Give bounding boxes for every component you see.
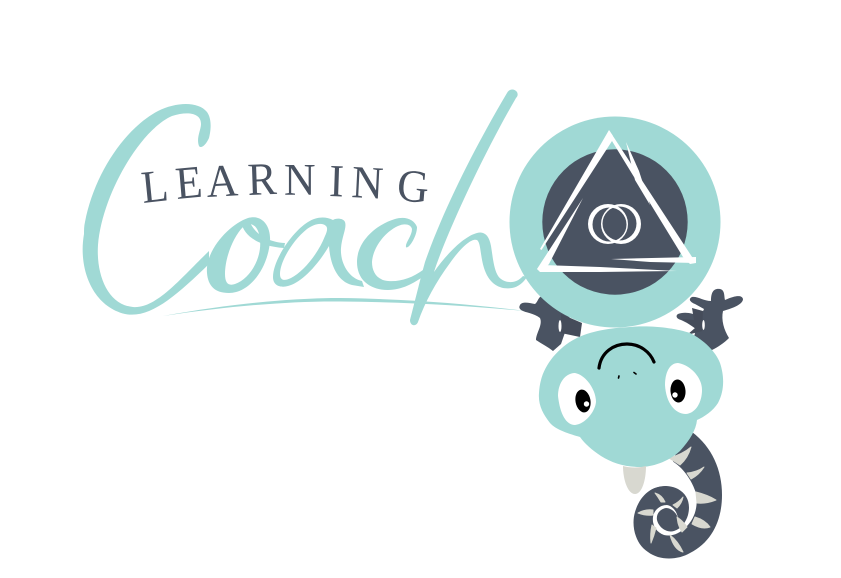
nostrils — [618, 372, 636, 378]
tongue — [623, 466, 646, 494]
wordmark: LEARNING: LEARNING — [139, 153, 431, 213]
eye white — [665, 363, 702, 414]
tail — [610, 432, 722, 558]
tail spikes — [638, 447, 716, 552]
underline swoosh — [163, 298, 525, 316]
triangle inner left stroke — [537, 198, 583, 272]
spike — [651, 525, 656, 543]
highlights — [672, 392, 678, 398]
highlights — [584, 401, 589, 407]
spike — [655, 493, 665, 502]
right hand — [677, 289, 743, 350]
letter h with tail into the badge — [410, 89, 527, 325]
letter C — [83, 104, 211, 315]
finger gap — [558, 320, 562, 332]
connecting stroke o to a — [241, 220, 285, 248]
spike — [673, 497, 683, 508]
triangle emblem — [537, 130, 696, 272]
wordmark: Coach script — [83, 89, 527, 325]
chameleon head — [539, 326, 723, 467]
twin rings — [588, 204, 641, 244]
pupil — [670, 379, 686, 403]
palm and fingers — [519, 296, 570, 351]
palm and fingers — [677, 289, 743, 350]
pupil — [574, 388, 592, 414]
triangle right stroke — [609, 130, 696, 264]
spike — [670, 535, 683, 552]
inner palm shadow — [561, 314, 582, 337]
finger gap — [702, 320, 705, 330]
chameleon hands — [519, 289, 743, 351]
letter a — [273, 218, 364, 287]
ring two — [601, 204, 641, 244]
eye white — [558, 373, 596, 425]
triangle left stroke — [540, 130, 613, 250]
spike — [696, 492, 716, 503]
left hand — [519, 296, 582, 351]
tail spiral white — [610, 450, 697, 536]
badge circle — [510, 116, 720, 328]
ring one — [588, 204, 628, 244]
spike — [687, 467, 704, 479]
left eye — [558, 373, 596, 425]
spike — [669, 447, 691, 465]
inner palm shadow — [682, 308, 703, 335]
right eye — [665, 363, 702, 414]
tail body — [634, 432, 722, 558]
letter c — [357, 218, 424, 290]
spike — [692, 517, 710, 528]
triangle base stroke — [537, 265, 677, 272]
badge inner disc — [542, 149, 688, 295]
triangle top right sliver — [626, 142, 650, 205]
letter o — [207, 217, 270, 293]
spike — [638, 510, 653, 515]
spike — [677, 517, 687, 532]
brow — [599, 344, 654, 368]
triangle base upper sliver — [611, 257, 696, 263]
